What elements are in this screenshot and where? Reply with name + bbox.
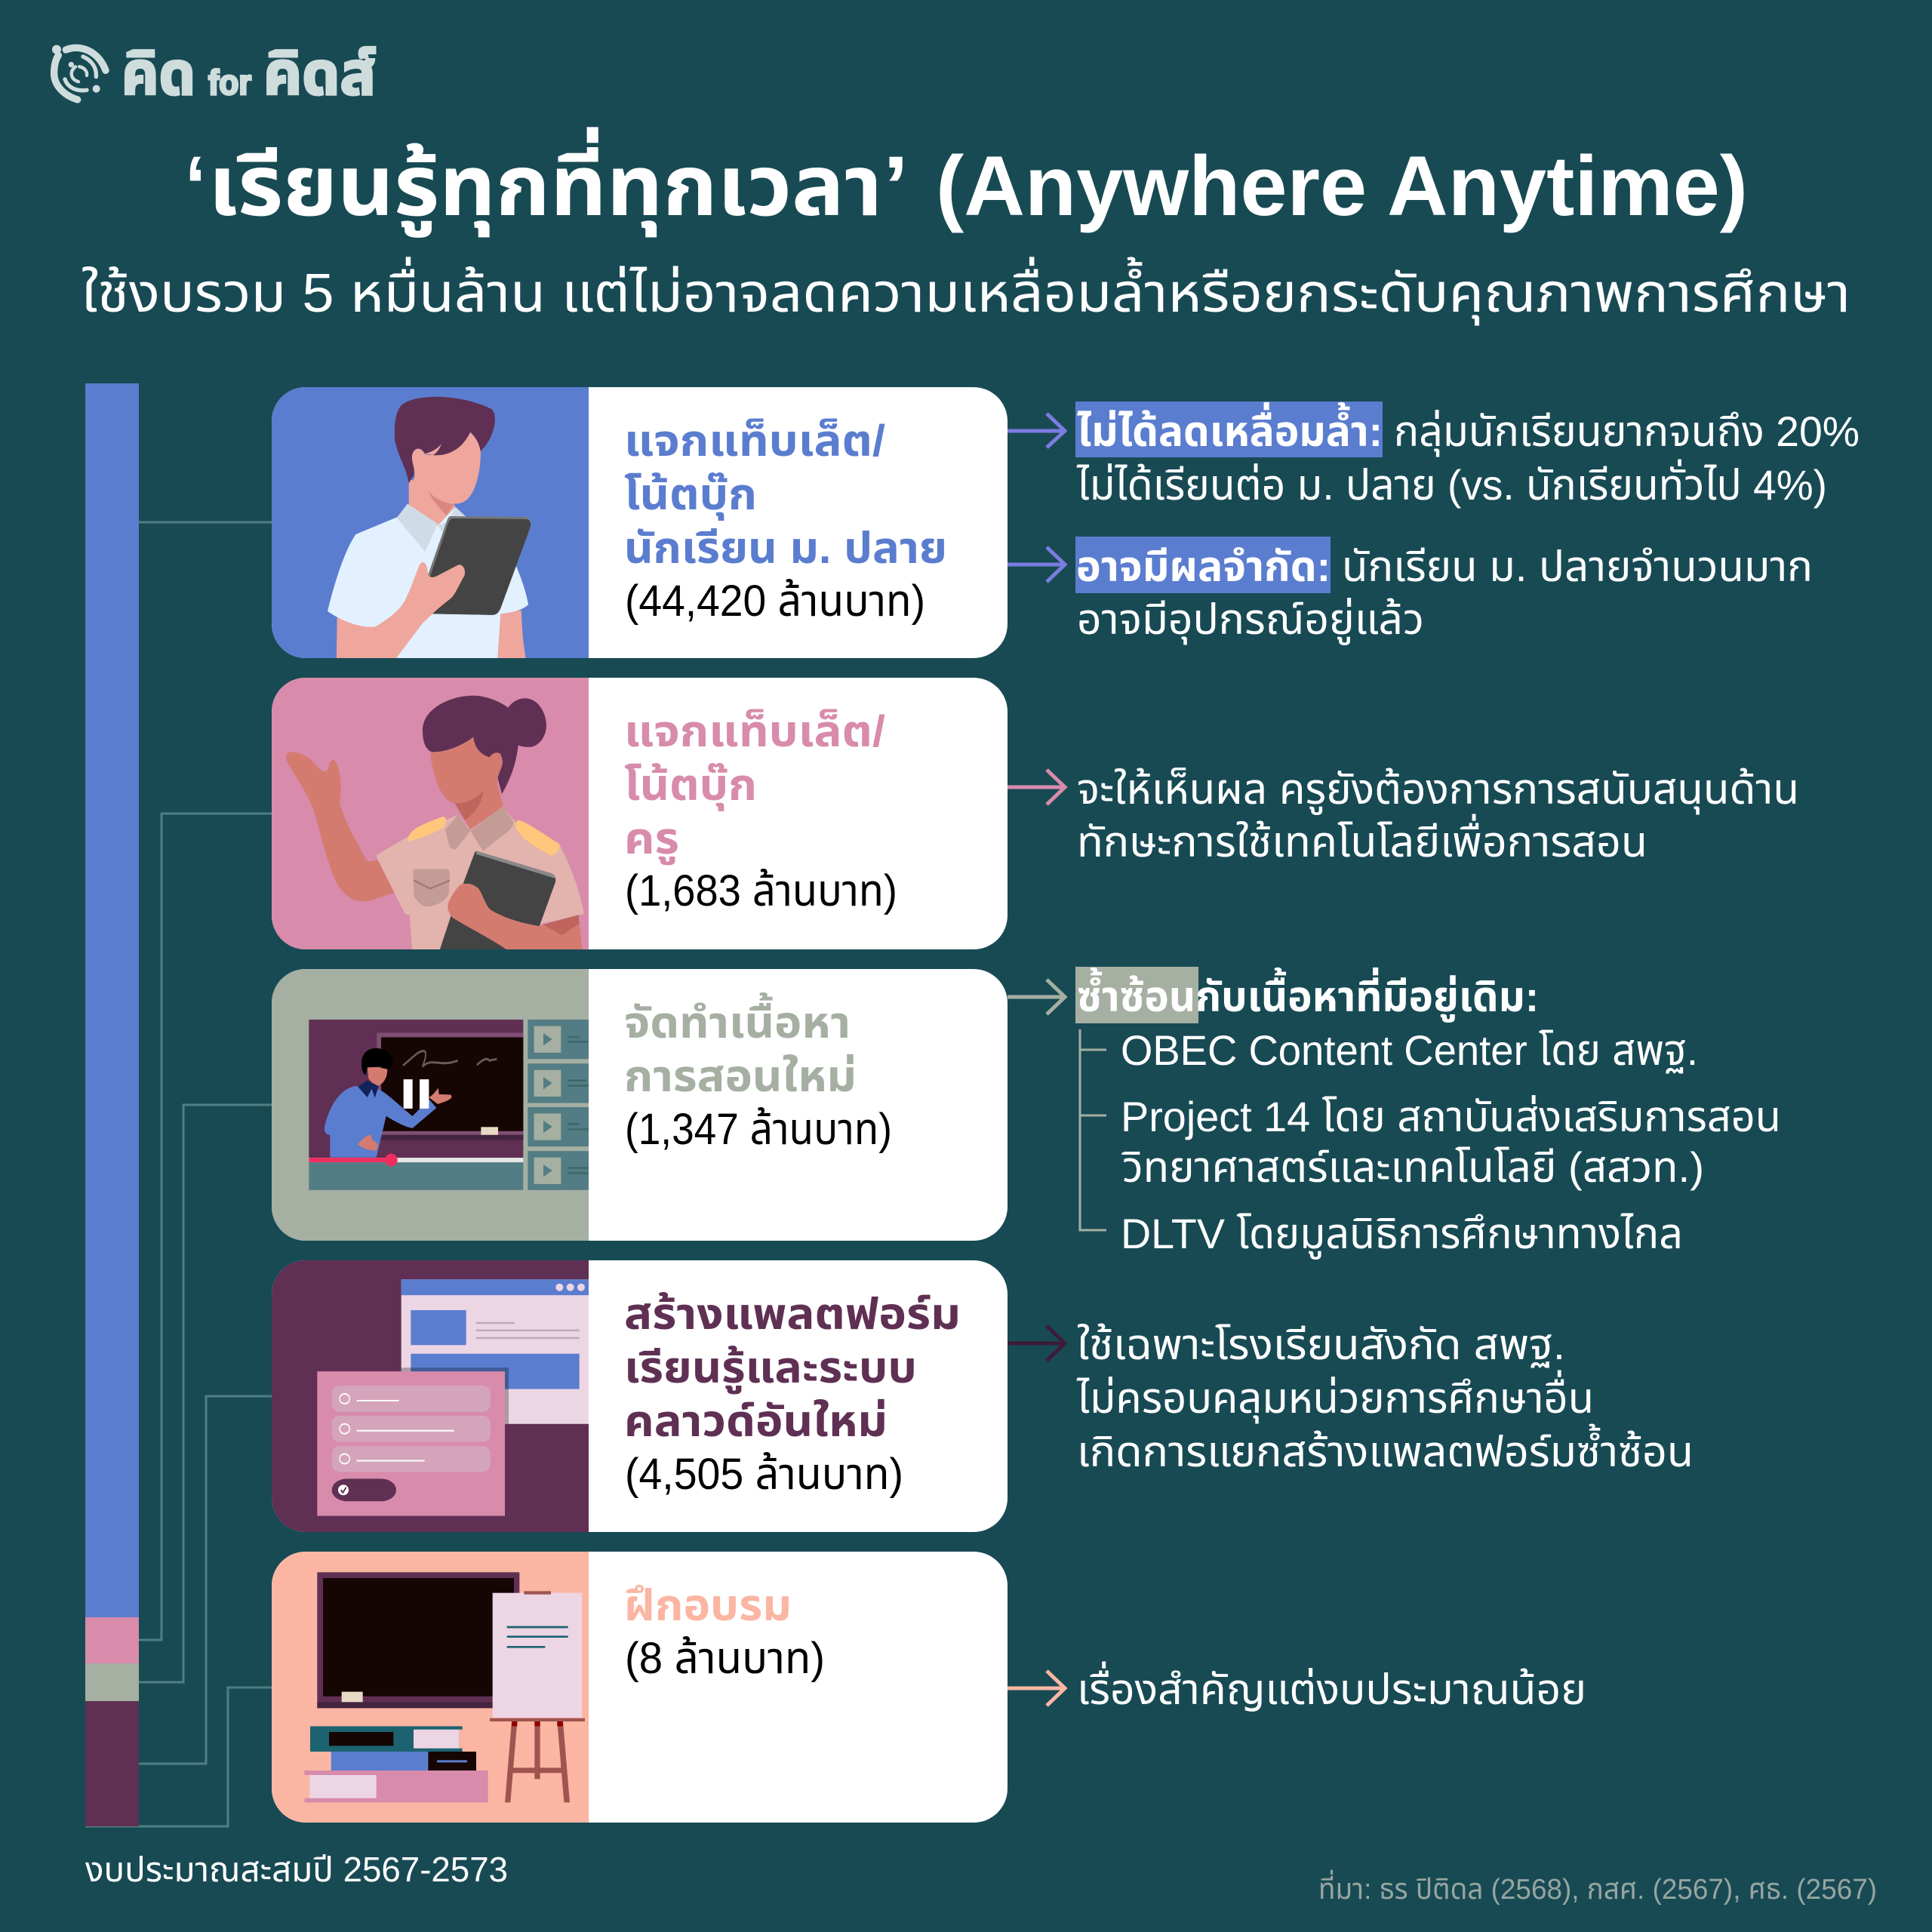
note: overlapping content: ซ้ำซ้อนกับเนื้อหาที่มีอยู่เดิม:: [1077, 967, 1539, 1023]
note: limited effect: นักเรียน ม. ปลายจำนวนมาก: [1342, 543, 1813, 590]
note: inequality: กลุ่มนักเรียนยากจนถึง 20%: [1394, 408, 1860, 457]
title: ‘: [185, 139, 206, 233]
note: platform scope: เกิดการแยกสร้างแพลตฟอร์มซ้ำซ้อน: [1077, 1423, 1694, 1475]
text: card 3 label: [624, 992, 892, 1154]
bar segment: platform: [85, 1701, 139, 1826]
text: card 4 label: คลาวด์อันใหม่: [624, 1397, 888, 1446]
note: inequality: ไม่ได้ลดเหลื่อมล้ำ:: [1077, 401, 1383, 455]
note: inequality: [1075, 401, 1860, 509]
text: card 4 label: (4,505 ล้านบาท): [625, 1450, 903, 1499]
text: card 3 label: (1,347 ล้านบาท): [625, 1105, 892, 1154]
panel: card 4 platform: [272, 1260, 1008, 1532]
title: (Anywhere Anytime): [936, 139, 1748, 233]
logo wordmark: [122, 40, 376, 107]
text: card 5 label: (8 ล้านบาท): [625, 1634, 825, 1683]
text: card 1 label: (44,420 ล้านบาท): [625, 577, 925, 626]
source: ที่มา: ธร ปิติดล (2568), กสศ. (2567), ศธ. (2567): [1318, 1869, 1877, 1906]
illustration: video lesson: [309, 1020, 589, 1190]
text: card 1 label: นักเรียน ม. ปลาย: [624, 524, 947, 573]
arrow: card 5 note: [1008, 1671, 1065, 1706]
text: card 1 label: โน้ตบุ๊ก: [624, 470, 757, 521]
panel: card 1 students: [272, 387, 1008, 658]
panel: card 2 teachers: [272, 678, 1008, 950]
note: platform scope: ใช้เฉพาะโรงเรียนสังกัด สพฐ.: [1077, 1321, 1565, 1368]
illustration: student with tablet: [328, 397, 531, 658]
bar caption: งบประมาณสะสมปี 2567-2573: [85, 1850, 508, 1889]
note: teacher support: จะให้เห็นผล ครูยังต้องการการสนับสนุนด้าน: [1077, 765, 1799, 815]
note: overlapping content: OBEC Content Center โดย สพฐ.: [1121, 1026, 1698, 1074]
arrow: card 1 note 2: [1008, 547, 1065, 582]
text: card 5 label: ฝึกอบรม: [624, 1581, 792, 1630]
illustration: teacher holding tablet: [286, 696, 584, 950]
bar segment: tablets for students: [85, 383, 139, 1617]
logo wordmark: for: [208, 63, 251, 102]
text: card 5 label: [624, 1581, 825, 1683]
note: limited effect: อาจมีผลจำกัด:: [1076, 543, 1331, 590]
note: overlapping content: วิทยาศาสตร์และเทคโนโลยี (สสวท.): [1121, 1143, 1704, 1191]
note: overlapping content: DLTV โดยมูลนิธิการศึกษาทางไกล: [1121, 1210, 1683, 1260]
text: card 3 label: จัดทำเนื้อหา: [624, 992, 851, 1048]
arrow: card 3 note: [1008, 980, 1065, 1014]
text: card 1 label: แจกแท็บเล็ต/: [624, 417, 885, 466]
text: card 1 label: [624, 417, 947, 626]
panel: card 3 new content: [272, 969, 1008, 1241]
text: card 2 label: แจกแท็บเล็ต/: [624, 707, 885, 756]
note: overlapping content: [1075, 967, 1781, 1260]
note: inequality: ไม่ได้เรียนต่อ ม. ปลาย (vs. นักเรียนทั่วไป 4%): [1076, 459, 1827, 509]
panel: card 5 training: [272, 1552, 1008, 1823]
text: card 3 label: การสอนใหม่: [624, 1052, 857, 1101]
note: limited effect: [1075, 537, 1813, 645]
illustration: learning platform windows: [317, 1279, 589, 1516]
text: card 2 label: [624, 707, 897, 915]
arrow: card 4 note: [1008, 1326, 1065, 1361]
arrow: card 2 note: [1008, 770, 1065, 804]
text: card 2 label: โน้ตบุ๊ก: [624, 761, 757, 811]
title: [185, 127, 1748, 238]
logo wordmark: คิด: [122, 40, 195, 107]
illustration: classroom board and books: [304, 1572, 585, 1802]
note: platform scope: [1076, 1321, 1694, 1475]
note: platform scope: ไม่ครอบคลุมหน่วยการศึกษาอื่น: [1076, 1370, 1594, 1423]
text: card 4 label: เรียนรู้และระบบ: [624, 1343, 917, 1395]
logo: [52, 40, 376, 107]
text: card 2 label: ครู: [624, 814, 679, 866]
text: card 4 label: สร้างแพลตฟอร์ม: [624, 1290, 961, 1339]
connector lines: [85, 522, 272, 1826]
note: training budget: เรื่องสำคัญแต่งบประมาณน้อย: [1077, 1661, 1586, 1713]
arrow: card 1 note 1: [1008, 414, 1065, 448]
stacked budget bar: [85, 383, 139, 1826]
note: overlapping content: Project 14 โดย สถาบันส่งเสริมการสอน: [1121, 1093, 1781, 1140]
logo wordmark: คิดส์: [263, 40, 376, 107]
text: card 4 label: [624, 1290, 961, 1499]
subtitle: ใช้งบรวม 5 หมื่นล้าน แต่ไม่อาจลดความเหลื่อมล้ำหรือยกระดับคุณภาพการศึกษา: [82, 257, 1850, 326]
note: teacher support: ทักษะการใช้เทคโนโลยีเพื่อการสอน: [1077, 814, 1647, 866]
title: ’: [883, 139, 909, 233]
bar segment: tablets for teachers: [85, 1617, 139, 1663]
title: เรียนรู้ทุกที่ทุกเวลา: [208, 127, 882, 238]
note: teacher support: [1077, 765, 1799, 866]
icon: logo rings: [52, 45, 106, 100]
bar segment: new content: [85, 1663, 139, 1701]
note: limited effect: อาจมีอุปกรณ์อยู่แล้ว: [1077, 595, 1424, 645]
text: card 2 label: (1,683 ล้านบาท): [625, 866, 897, 915]
